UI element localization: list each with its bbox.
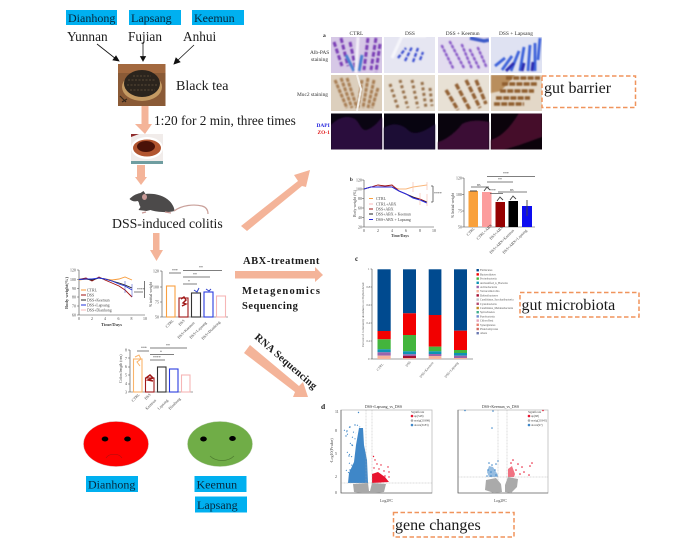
chart: colon length bars: Colon length (cm): [119, 354, 123, 383]
chart: % initial weight bars: 75: [155, 300, 159, 304]
legend: phyla: unclassified_k_Bacteria: [480, 281, 508, 285]
chart: ABX % initial weight bars: ns: [477, 183, 481, 187]
chart: volcano DSS+Lapsang vs DSS: -Log10(Pvalue): [330, 438, 334, 463]
chart: body weight line chart: 100: [70, 278, 76, 282]
chart: stacked bar gut microbiota: DSS+Keemun: [419, 361, 435, 379]
chart: ABX body weight lines: CTRL+ABX: [376, 202, 397, 206]
chart: ABX % initial weight bars: [451, 172, 535, 255]
arrow: Fujian to black tea: [140, 42, 146, 61]
callout: gut microbiota: gut microbiota: [522, 297, 615, 314]
chart: stacked bar gut microbiota: 0.4: [366, 321, 371, 325]
image: Alb-PAS row: [331, 36, 542, 73]
bar: DSS+Lapsang: [454, 269, 467, 359]
chart: % initial weight bars: DSS+Lapsang: [189, 321, 208, 340]
text: panel letter c: c: [355, 255, 358, 263]
chart: volcano DSS+Lapsang vs DSS: up(548): [414, 414, 424, 418]
chart: volcano DSS+Keemun vs DSS: up(68): [531, 414, 539, 418]
chart: colon length bars: 7: [125, 357, 127, 361]
chart: ABX body weight lines: 80: [358, 197, 362, 201]
text: panel letter d: d: [321, 402, 326, 411]
chart: body weight line chart: [64, 268, 147, 327]
chart: ABX body weight lines: 4: [391, 229, 393, 233]
chart: volcano DSS+Keemun vs DSS: Log2FC: [494, 499, 507, 503]
arrow: tea to infusion: [135, 106, 152, 134]
chart: volcano DSS+Lapsang vs DSS: 2: [335, 475, 337, 479]
bar: CTRL: [378, 269, 391, 359]
arrow: to gut barrier: [241, 170, 310, 231]
chart: % initial weight bars: DSS: [178, 319, 186, 327]
legend: phyla: Planctomycetes: [480, 327, 499, 331]
arrow: colitis to phenotype charts: [150, 233, 163, 261]
chart: ABX % initial weight bars: 120: [456, 176, 462, 180]
chart: volcano DSS+Lapsang vs DSS: nosig(20398): [414, 418, 430, 422]
text: ABX-treatment: ABX-treatment: [243, 256, 320, 267]
legend: phyla: Spirochaetes: [480, 310, 496, 314]
chart: body weight line chart: 80: [72, 296, 76, 300]
chart: body weight line chart: 120: [70, 268, 76, 272]
callout: gut barrier: [542, 76, 636, 108]
chart: colon length bars: 4: [125, 382, 127, 386]
chart: volcano DSS+Lapsang vs DSS: Log2FC: [380, 499, 393, 503]
chart: colon length bars: [119, 344, 193, 411]
chart: stacked bar gut microbiota: DSS+Lapsang: [444, 361, 460, 379]
chart: stacked bar gut microbiota: Percent of community abundance on Phylum level: [361, 282, 365, 347]
image: Muc2 row: [331, 75, 542, 111]
chart: % initial weight bars: 50: [155, 316, 159, 320]
chart: colon length bars: ****: [153, 356, 161, 360]
chart: ABX body weight lines: 20: [358, 226, 362, 230]
chart: ABX body weight lines: Body weight (%): [353, 189, 357, 217]
text: column headers: DSS + Lapsang: [499, 31, 533, 37]
chart: stacked bar gut microbiota: 1: [368, 267, 370, 271]
callout: gene changes: gene changes: [395, 517, 481, 534]
text: column headers: DSS + Keemun: [446, 31, 480, 37]
legend: phyla: Candidatus_Melainabacteria: [480, 306, 514, 310]
chart: ABX % initial weight bars: 100: [456, 193, 462, 197]
text: column headers: [350, 31, 533, 37]
chart: body weight line chart: DSS+Lapsang: [87, 304, 110, 308]
chart: ABX % initial weight bars: % Initial weight: [451, 192, 455, 218]
chart: body weight line chart: 6: [118, 317, 120, 321]
chart: ABX % initial weight bars: CTRL: [466, 226, 476, 237]
text: Metagenomics Sequencing: [242, 286, 321, 312]
chart: stacked bar gut microbiota: 0: [368, 357, 370, 361]
text: extraction conditions: 1:20 for 2 min, three times: [154, 113, 296, 128]
chart: % initial weight bars: [149, 266, 228, 341]
legend: phyla: Firmicutes: [480, 268, 493, 272]
chart: colon length bars: 6: [125, 365, 127, 369]
chart: body weight line chart: ****: [137, 288, 145, 292]
chart: % initial weight bars: DSS+Keemun: [177, 321, 196, 340]
chart: volcano DSS+Keemun vs DSS: down(97): [531, 423, 543, 427]
chart: volcano DSS+Lapsang vs DSS: down(3183): [414, 423, 429, 427]
text: RNA Sequencing: RNA Sequencing: [252, 332, 319, 392]
chart: % initial weight bars: *: [188, 280, 190, 284]
chart: volcano DSS+Lapsang vs DSS: 0: [335, 491, 337, 495]
chart: % initial weight bars: 100: [153, 286, 159, 290]
label: Dianhong variety: Dianhong: [68, 11, 115, 25]
bar: DSS: [403, 269, 416, 359]
chart: % initial weight bars: CTRL: [165, 318, 175, 329]
chart: volcano DSS+Lapsang vs DSS: [330, 405, 432, 503]
panel b: ABX body weight charts: [350, 172, 535, 255]
chart: ABX % initial weight bars: CTRL+ABX: [476, 223, 493, 241]
chart: ABX body weight lines: [353, 178, 442, 238]
text: row labels: ZO-1: [318, 130, 330, 136]
chart: body weight line chart: 60: [72, 314, 76, 318]
legend: phyla: Synergistetes: [480, 323, 496, 327]
chart: ABX body weight lines: 120: [356, 178, 362, 182]
text: row labels: [297, 50, 330, 136]
panel a: histology staining grid: [297, 31, 542, 150]
chart: ABX % initial weight bars: DSS+ABX+Lapsang: [502, 229, 528, 255]
legend: phyla: others: [480, 331, 488, 335]
callout: gut microbiota: [520, 292, 639, 317]
label: Lapsang result: [195, 496, 247, 512]
text: row labels: DAPI: [316, 123, 330, 129]
icon: red sad face: [84, 422, 148, 466]
chart: volcano DSS+Lapsang vs DSS: 5: [335, 452, 337, 456]
chart: ABX body weight lines: 10: [432, 229, 436, 233]
chart: ABX % initial weight bars: 75: [458, 210, 462, 214]
chart: body weight line chart: 70: [72, 304, 76, 308]
legend: phyla: Actinobacteria: [480, 285, 498, 289]
chart: colon length bars: **: [166, 344, 170, 348]
chart: volcano DSS+Lapsang vs DSS: 8: [335, 429, 337, 433]
icon: black tea leaves photo: [118, 64, 166, 106]
chart: body weight line chart: 10: [143, 317, 147, 321]
callout: gut barrier: gut barrier: [544, 80, 612, 97]
chart: body weight line chart: Body weight(%): [64, 277, 69, 309]
chart: ABX % initial weight bars: ns: [510, 188, 514, 192]
text: Metagenomics Sequencing: Metagenomics: [242, 286, 321, 297]
chart: ABX body weight lines: DSS+ABX: [376, 208, 394, 212]
label: Keemun result: Keemun: [196, 478, 237, 492]
chart: ABX body weight lines: DSS+ABX + Lapsang: [376, 218, 411, 222]
chart: volcano DSS+Keemun vs DSS: [458, 405, 548, 503]
chart: body weight line chart: DSS: [87, 294, 94, 298]
chart: colon length bars: 8: [125, 348, 127, 352]
icon: green happy face: [188, 422, 252, 466]
legend: phyla: Bacteroidetes: [480, 272, 497, 276]
chart: colon length bars: Keemun: [145, 399, 157, 411]
chart: volcano DSS+Keemun vs DSS: DSS+Keemun_vs_DSS: [482, 405, 519, 409]
legend: phyla: Proteobacteria: [480, 277, 497, 281]
label: Lapsang variety: Lapsang: [131, 11, 172, 25]
chart: stacked bar gut microbiota: 0.8: [366, 285, 371, 289]
text: row labels: Alb-PAS: [310, 50, 329, 56]
text: row labels: Muc2 staining: [297, 92, 328, 98]
arrow: to gut microbiota: [235, 267, 323, 282]
chart: ABX % initial weight bars: 50: [458, 226, 462, 230]
text: column headers: CTRL: [350, 31, 363, 37]
label: Dianhong result: Dianhong: [88, 478, 135, 492]
dots: down-regulated: [344, 412, 368, 483]
chart: volcano DSS+Keemun vs DSS: nosig(20345): [531, 418, 547, 422]
label: Lapsang result: Lapsang: [197, 498, 238, 512]
chart: ABX body weight lines: 0: [363, 229, 365, 233]
chart: % initial weight bars: ***: [172, 269, 178, 273]
chart: ABX body weight lines: 60: [358, 206, 362, 210]
chart: % initial weight bars: 120: [153, 270, 159, 274]
chart: ABX body weight lines: 100: [356, 188, 362, 192]
chart: body weight line chart: 2: [91, 317, 93, 321]
chart: volcano DSS+Lapsang vs DSS: DSS+Lapsang_vs_DSS: [365, 405, 402, 409]
chart: colon length bars: Dianhong: [168, 397, 182, 411]
text: Yunnan: Yunnan: [67, 29, 108, 44]
arrow: Anhui to black tea: [174, 45, 194, 64]
chart: stacked bar gut microbiota: DSS: [405, 360, 412, 368]
arrow: Yunnan to black tea: [97, 44, 119, 61]
bar: DSS+Keemun: [429, 269, 441, 359]
dots: down-regulated: [464, 410, 499, 477]
chart: % initial weight bars: DSS+Dianhong: [201, 320, 221, 341]
text: column headers: DSS: [405, 31, 415, 37]
chart: body weight line chart: DSS+Dianhong: [87, 308, 112, 312]
chart: body weight line chart: 8: [130, 317, 132, 321]
text: Anhui: Anhui: [183, 29, 217, 44]
chart: stacked bar gut microbiota: 0.6: [366, 303, 371, 307]
chart: % initial weight bars: % initial weight: [149, 281, 153, 307]
text: Fujian: Fujian: [128, 29, 162, 44]
label: Keemun variety: Keemun: [194, 11, 235, 25]
chart: ABX body weight lines: ****: [434, 192, 442, 196]
legend: phyla: Fusobacteria: [480, 314, 495, 318]
chart: body weight line chart: 4: [104, 317, 106, 321]
chart: ABX body weight lines: 40: [358, 216, 362, 220]
arrow: to gene changes: [244, 345, 308, 397]
chart: ABX % initial weight bars: ***: [503, 172, 509, 176]
chart: ABX body weight lines: DSS+ABX + Keemun: [376, 212, 411, 216]
chart: colon length bars: ***: [141, 346, 147, 350]
chart: % initial weight bars: **: [199, 266, 203, 270]
legend: phyla: Candidatus_Saccharibacteria: [480, 298, 514, 302]
chart: colon length bars: *: [160, 350, 162, 354]
chart: body weight line chart: CTRL: [87, 288, 98, 292]
chart: body weight line chart: Time/Days: [101, 322, 122, 327]
chart: ABX % initial weight bars: DSS+ABX: [489, 225, 504, 241]
chart: colon length bars: 3: [125, 390, 127, 394]
dots: not significant: [353, 483, 386, 493]
dots: up-regulated: [508, 410, 544, 477]
chart: ABX body weight lines: 6: [405, 229, 407, 233]
arrow: infusion to mouse: [135, 165, 147, 185]
label: Keemun result: [194, 476, 246, 492]
icon: tea infusion photo: [131, 134, 163, 164]
image: DAPI ZO-1 row: [331, 113, 542, 150]
text: Black tea: Black tea: [176, 79, 229, 94]
dots: not significant: [485, 478, 502, 493]
text: row labels: staining: [311, 57, 328, 63]
legend: phyla: Cyanobacteria: [480, 302, 497, 306]
chart: volcano DSS+Lapsang vs DSS: Significant: [411, 410, 424, 414]
chart: colon length bars: CTRL: [131, 392, 141, 403]
chart: body weight line chart: 0: [78, 317, 80, 321]
chart: ABX body weight lines: Time/Days: [391, 234, 409, 238]
chart: ABX % initial weight bars: **: [498, 178, 502, 182]
legend: phyla: Deferribacteres: [480, 293, 499, 297]
legend: phyla: Chloroflexi: [480, 319, 494, 323]
chart: body weight line chart: DSS+Keemun: [87, 298, 110, 302]
text: panel letter a: a: [323, 33, 326, 39]
chart: body weight line chart: 90: [72, 287, 76, 291]
chart: stacked bar gut microbiota: 0.2: [366, 339, 371, 343]
chart: ABX body weight lines: CTRL: [376, 197, 387, 201]
icon: mouse: [130, 191, 208, 214]
callout: gene changes: [394, 512, 514, 537]
dots: up-regulated: [372, 456, 390, 483]
chart: % initial weight bars: **: [193, 273, 197, 277]
chart: ABX % initial weight bars: DSS+ABX+Keemun: [489, 229, 515, 255]
chart: colon length bars: Lapsang: [157, 399, 169, 411]
chart: stacked bar gut microbiota: [361, 267, 514, 379]
chart: colon length bars: 5: [125, 374, 127, 378]
chart: volcano DSS+Lapsang vs DSS: 11: [335, 410, 339, 414]
text: panel letter b: b: [350, 178, 353, 183]
legend: phyla: Verrucomicrobia: [480, 289, 500, 293]
chart: ABX body weight lines: 2: [377, 229, 379, 233]
chart: volcano DSS+Keemun vs DSS: Significant: [528, 410, 541, 414]
chart: colon length bars: DSS: [144, 393, 152, 401]
text: DSS-induced colitis: DSS-induced colitis: [112, 216, 223, 231]
chart: stacked bar gut microbiota: CTRL: [376, 362, 384, 372]
legend: phyla: [476, 268, 514, 335]
chart: ABX % initial weight bars: ***: [490, 189, 496, 193]
chart: ABX body weight lines: 8: [419, 229, 421, 233]
text: Metagenomics Sequencing: Sequencing: [242, 301, 299, 312]
